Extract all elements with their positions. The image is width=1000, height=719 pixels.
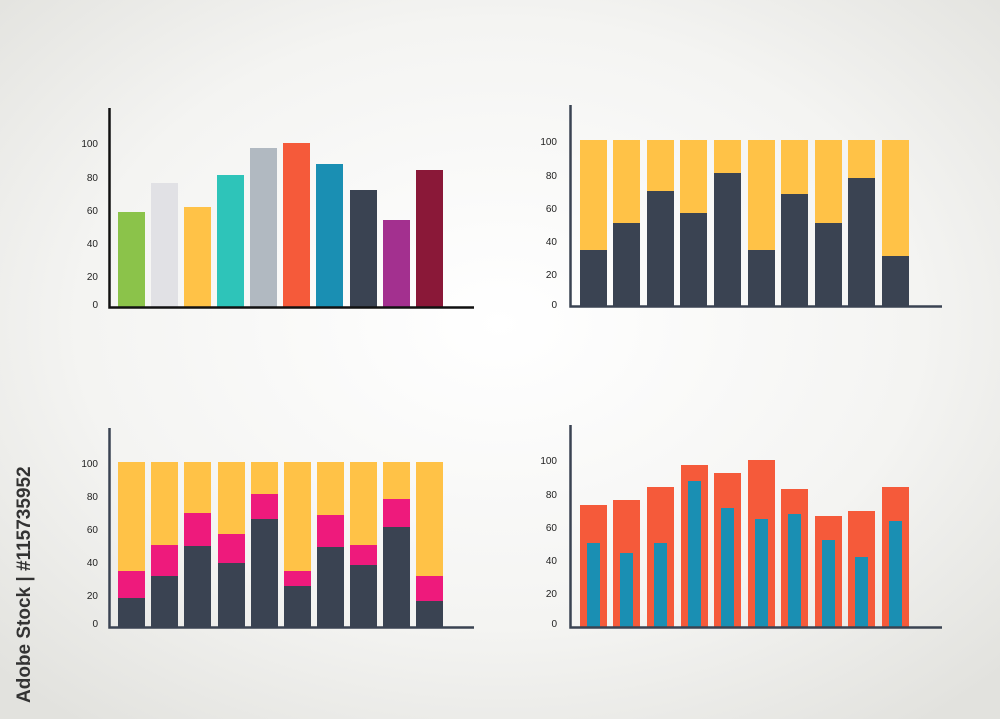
axes [110, 428, 474, 628]
y axis labels: 40 [546, 237, 557, 248]
bars [118, 143, 443, 307]
chart: triple stacked bars bottom-left [81, 428, 474, 630]
y axis labels [81, 459, 98, 630]
axes [570, 105, 942, 306]
y axis labels: 0 [92, 300, 98, 311]
y axis labels: 80 [87, 173, 98, 184]
y axis labels: 60 [546, 523, 557, 534]
y axis labels: 0 [92, 619, 98, 630]
y axis labels: 60 [87, 525, 98, 536]
y axis labels: 20 [87, 591, 98, 602]
y axis labels: 60 [87, 206, 98, 217]
y axis labels: 100 [540, 456, 557, 467]
y axis labels: 60 [546, 204, 557, 215]
y axis labels: 20 [546, 589, 557, 600]
y axis labels: 80 [546, 490, 557, 501]
chart: stacked bars top-right [540, 105, 942, 311]
y axis labels [81, 139, 98, 311]
y axis labels [540, 456, 557, 630]
y axis labels: 0 [551, 300, 557, 311]
y axis labels: 100 [81, 459, 98, 470]
bars [580, 140, 909, 306]
watermark text vertical: Adobe Stock | #115735952 [14, 466, 35, 703]
y axis labels: 40 [87, 558, 98, 569]
axes [110, 108, 474, 308]
bars [580, 460, 909, 627]
y axis labels: 80 [87, 492, 98, 503]
y axis labels: 20 [87, 272, 98, 283]
y axis labels: 20 [546, 270, 557, 281]
y axis labels: 100 [540, 137, 557, 148]
chart: overlapping bars bottom-right [540, 425, 942, 630]
y axis labels: 80 [546, 171, 557, 182]
chart: simple bars top-left [81, 108, 474, 311]
y axis labels: 40 [546, 556, 557, 567]
y axis labels [540, 137, 557, 311]
y axis labels: 100 [81, 139, 98, 150]
axes [570, 425, 942, 628]
y axis labels: 40 [87, 239, 98, 250]
bars [118, 462, 443, 627]
y axis labels: 0 [551, 619, 557, 630]
